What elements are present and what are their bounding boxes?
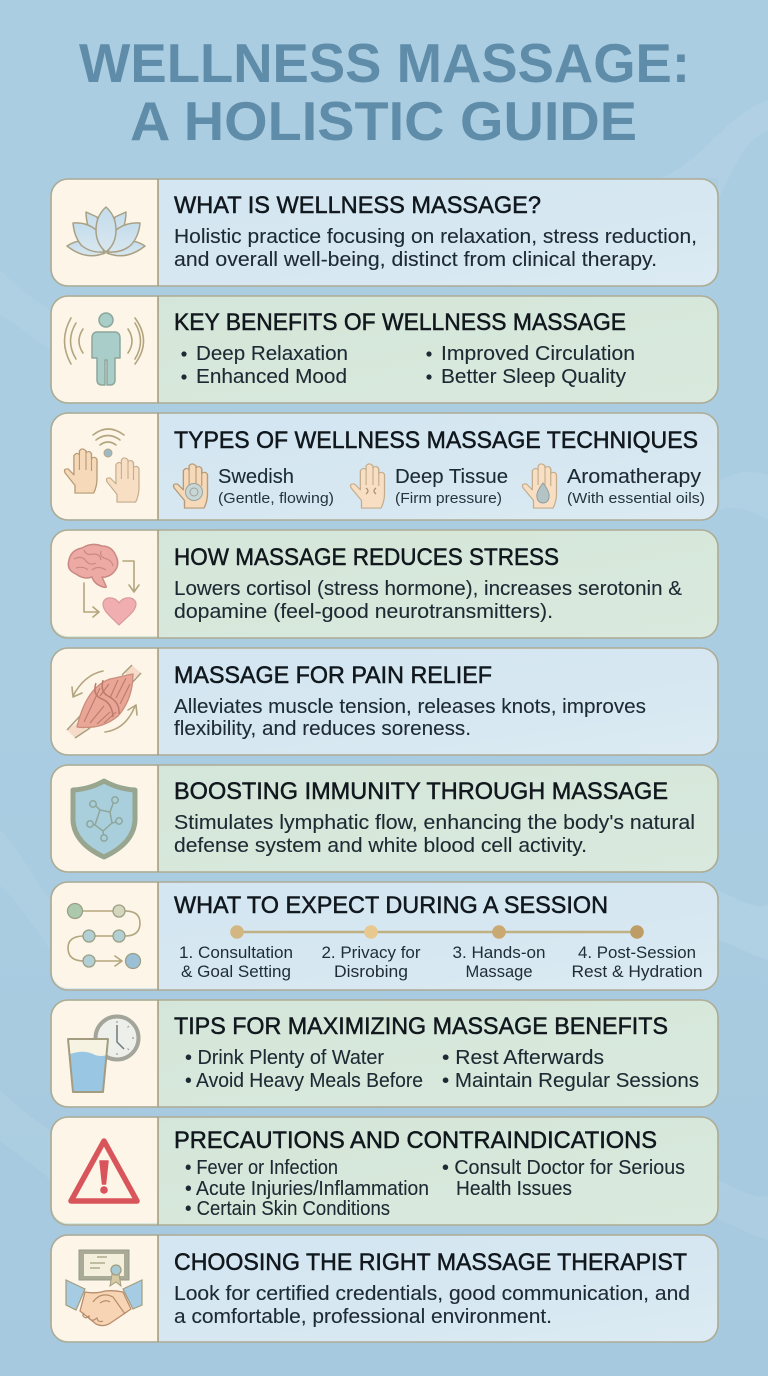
contraindications list: Health Issues [456, 1177, 572, 1200]
heading: CHOOSING THE RIGHT MASSAGE THERAPIST [174, 1249, 687, 1276]
title: A HOLISTIC GUIDE [130, 90, 637, 152]
panel: boosting immunity [51, 765, 718, 872]
benefits list: Better Sleep Quality [441, 365, 627, 388]
contraindications list: • Fever or Infection [185, 1156, 338, 1179]
panel: types of techniques [51, 413, 718, 520]
description [174, 811, 695, 857]
session timeline: 2. Privacy for [322, 944, 421, 962]
session timeline: & Goal Setting [181, 963, 291, 981]
benefits list: Deep Relaxation [196, 342, 348, 365]
heading: TIPS FOR MAXIMIZING MASSAGE BENEFITS [174, 1013, 668, 1040]
description: a comfortable, professional environment. [174, 1305, 552, 1328]
title [79, 32, 690, 152]
heading: MASSAGE FOR PAIN RELIEF [174, 662, 492, 689]
session timeline [179, 925, 702, 981]
icon: lotus [67, 207, 145, 256]
description: Alleviates muscle tension, releases knots, improves [174, 695, 646, 718]
benefits list [181, 342, 635, 388]
description: Look for certified credentials, good communication, and [174, 1282, 690, 1305]
description: flexibility, and reduces soreness. [174, 717, 471, 740]
tips list: • Drink Plenty of Water [185, 1046, 384, 1069]
description [174, 695, 646, 740]
description: Stimulates lymphatic flow, enhancing the body's natural [174, 811, 695, 834]
contraindications list: • Consult Doctor for Serious [442, 1156, 685, 1179]
technique: aromatherapy: (With essential oils) [567, 490, 705, 507]
icon: warning triangle [71, 1141, 137, 1201]
technique: deep tissue: Deep Tissue [395, 465, 508, 488]
panel: precautions [51, 1117, 718, 1225]
heading: PRECAUTIONS AND CONTRAINDICATIONS [174, 1127, 657, 1154]
icon: clock and water glass [68, 1016, 138, 1092]
session timeline: Massage [466, 963, 532, 981]
icon: muscle with arrows [67, 665, 141, 738]
heading: BOOSTING IMMUNITY THROUGH MASSAGE [174, 778, 668, 805]
icon: person with waves [64, 313, 144, 385]
heading: KEY BENEFITS OF WELLNESS MASSAGE [174, 309, 626, 336]
description: defense system and white blood cell activity. [174, 834, 587, 857]
session timeline: 4. Post-Session [578, 944, 696, 962]
description: and overall well-being, distinct from clinical therapy. [174, 248, 657, 271]
benefits list: Enhanced Mood [196, 365, 347, 388]
description [174, 1282, 690, 1328]
heading: WHAT TO EXPECT DURING A SESSION [174, 892, 608, 919]
technique: aromatherapy: Aromatherapy [567, 465, 702, 488]
benefits list: Improved Circulation [441, 342, 635, 365]
heading: HOW MASSAGE REDUCES STRESS [174, 544, 559, 571]
description: dopamine (feel-good neurotransmitters). [174, 600, 553, 623]
tips list: • Avoid Heavy Meals Before [185, 1069, 423, 1092]
technique: swedish [173, 464, 334, 508]
contraindications list: • Acute Injuries/Inflammation [185, 1177, 429, 1200]
session timeline: 3. Hands-on [452, 944, 546, 962]
icon: brain and heart [68, 544, 139, 625]
session timeline: Disrobing [334, 963, 408, 981]
panel: tips [51, 1000, 718, 1107]
heading: TYPES OF WELLNESS MASSAGE TECHNIQUES [174, 427, 698, 454]
tips list [185, 1046, 699, 1092]
description [174, 225, 697, 271]
technique: swedish: Swedish [218, 465, 294, 488]
icon: shield with molecule [73, 781, 135, 857]
tips list: • Rest Afterwards [442, 1046, 604, 1069]
contraindications list [185, 1156, 685, 1220]
panel: choosing a therapist [51, 1235, 718, 1342]
session timeline: Rest & Hydration [572, 963, 702, 981]
panel: what to expect [51, 882, 718, 990]
title: WELLNESS MASSAGE: [79, 32, 690, 94]
panel: what is wellness massage [51, 179, 718, 286]
description: Lowers cortisol (stress hormone), increases serotonin & [174, 577, 682, 600]
description [174, 577, 682, 623]
tips list: • Maintain Regular Sessions [442, 1069, 699, 1092]
technique: deep tissue: (Firm pressure) [395, 490, 502, 507]
panel: how massage reduces stress [51, 530, 718, 638]
session timeline: 1. Consultation [179, 944, 293, 962]
description: Holistic practice focusing on relaxation, stress reduction, [174, 225, 697, 248]
panel: key benefits [51, 296, 718, 403]
technique: aromatherapy [522, 464, 705, 508]
technique: swedish: (Gentle, flowing) [218, 490, 334, 507]
panel: massage for pain relief [51, 648, 718, 755]
icon: certificate and handshake [66, 1250, 142, 1326]
contraindications list: • Certain Skin Conditions [185, 1197, 390, 1220]
heading: WHAT IS WELLNESS MASSAGE? [174, 192, 541, 219]
icon: process path [68, 904, 140, 968]
technique: deep tissue [350, 464, 508, 508]
icon: hands with signal [64, 429, 139, 502]
